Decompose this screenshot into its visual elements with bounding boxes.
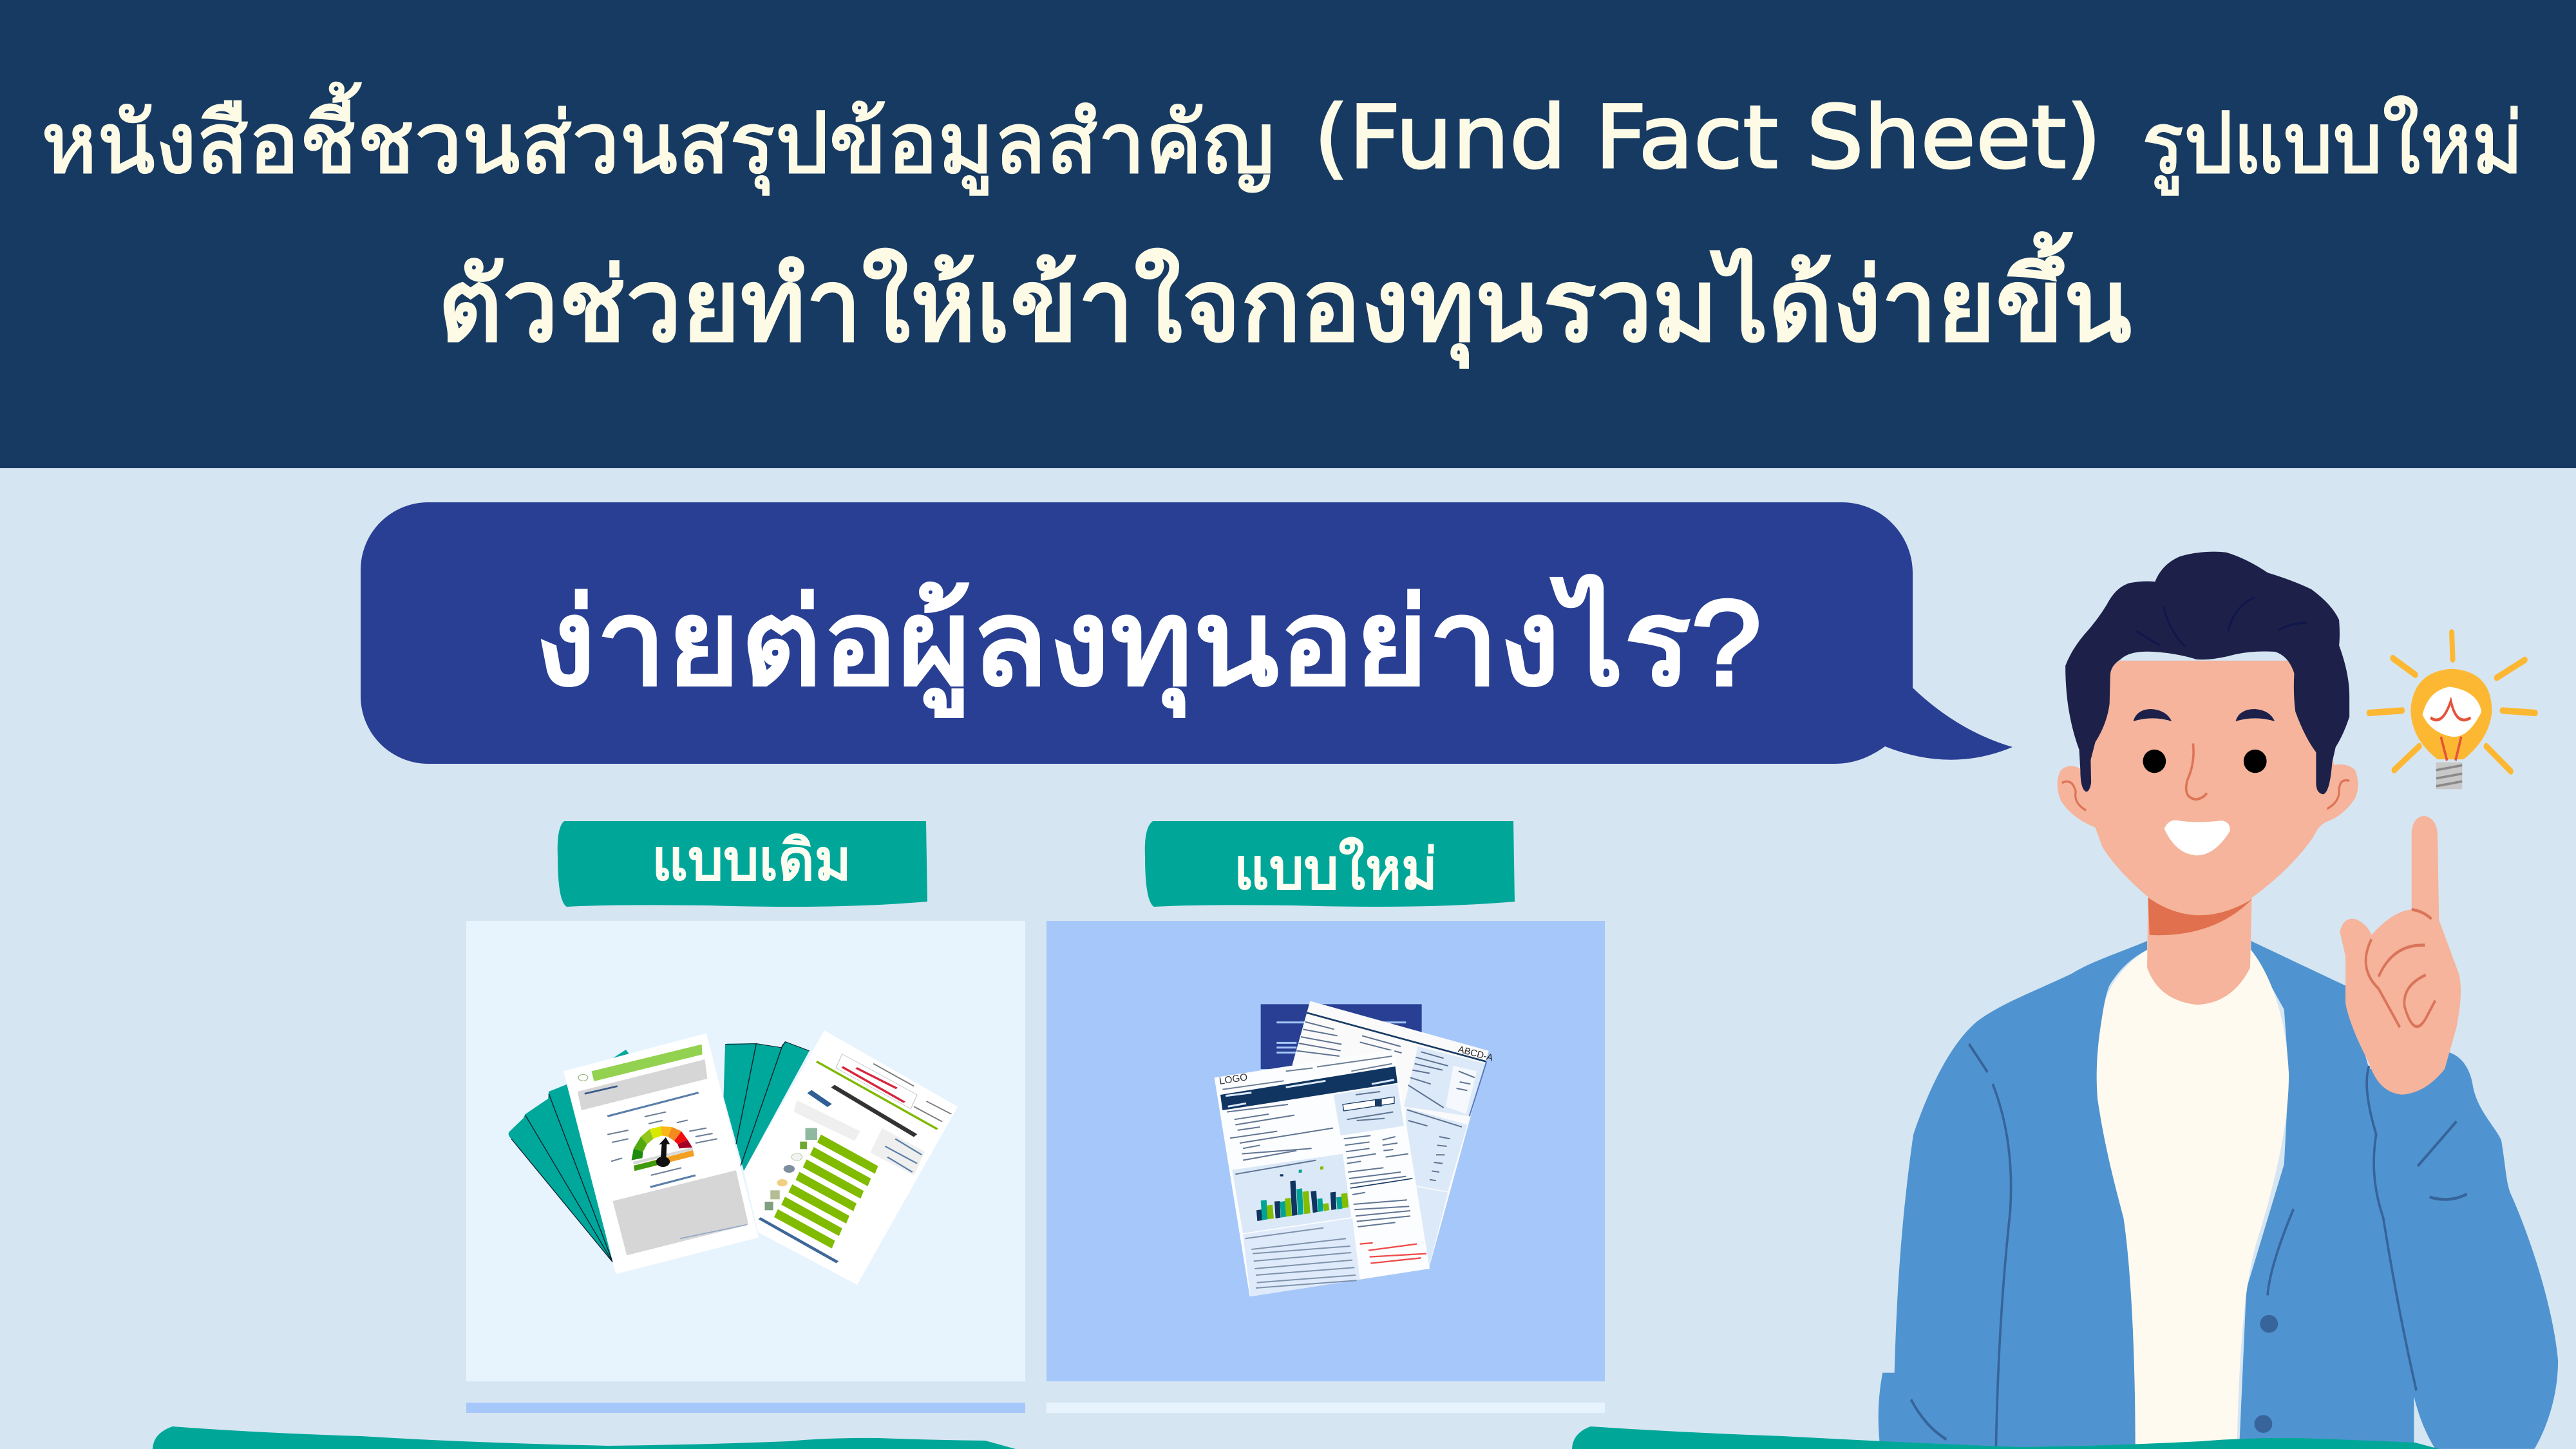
contents icons (765, 1128, 817, 1210)
jacket lines (1911, 1044, 2467, 1449)
risk gauge (632, 1126, 694, 1171)
title line 2: ตัวช่วยทำให้เข้าใจกองทุนรวมได้ง่ายขึ้น (438, 232, 2132, 368)
back sheet fund code: ABCD-A (1457, 1045, 1494, 1064)
title line 1 (41, 82, 2523, 195)
back data sheet (1293, 1001, 1489, 1270)
neck (2147, 891, 2252, 1005)
tab: new format (1145, 821, 1515, 907)
tab: old format (558, 821, 927, 907)
new format documents (1215, 1001, 1494, 1296)
eyebrows (2133, 709, 2275, 721)
jacket (1879, 941, 2558, 1449)
hair strands (2136, 597, 2307, 647)
person (1879, 552, 2558, 1449)
title line 1: (Fund Fact Sheet) (1314, 87, 2101, 188)
ear lines (2062, 781, 2349, 810)
blue back document (1261, 1004, 1422, 1069)
bar chart (1256, 1166, 1349, 1221)
left teal fan (509, 1050, 645, 1262)
light bulb (2369, 632, 2535, 789)
hand (2340, 816, 2461, 1095)
hand lines (2366, 909, 2435, 1027)
panel: new format (1046, 921, 1605, 1381)
buttons (2255, 1315, 2278, 1433)
front data sheet (1215, 1050, 1430, 1296)
tab: new format: แบบใหม่ (1234, 837, 1437, 901)
face and ears (2058, 661, 2358, 915)
shirt (2097, 950, 2289, 1449)
eyes (2143, 750, 2267, 773)
old format documents (509, 1030, 958, 1285)
smile (2164, 820, 2230, 855)
speech bubble (361, 502, 2012, 764)
teal strip right (1572, 1426, 2439, 1449)
panel: old format (466, 921, 1025, 1381)
left document page (564, 1033, 759, 1274)
front sheet logo: LOGO (1218, 1072, 1248, 1087)
right document page (744, 1030, 958, 1285)
header band (0, 0, 2576, 468)
green contents bars (774, 1135, 878, 1249)
right teal fan (724, 1042, 810, 1171)
hair (2065, 552, 2349, 794)
bubble question text: ง่ายต่อผู้ลงทุนอย่างไร? (535, 575, 1761, 716)
title line 1: หนังสือชี้ชวนส่วนสรุปข้อมูลสำคัญ (41, 82, 1274, 195)
tab: old format: แบบเดิม (652, 828, 851, 892)
teal strip left (153, 1426, 1016, 1449)
bar under old panel (466, 1403, 1025, 1413)
bar under new panel (1046, 1403, 1605, 1413)
title line 1: รูปแบบใหม่ (2142, 96, 2523, 195)
nose (2186, 743, 2207, 799)
head (2058, 552, 2358, 915)
